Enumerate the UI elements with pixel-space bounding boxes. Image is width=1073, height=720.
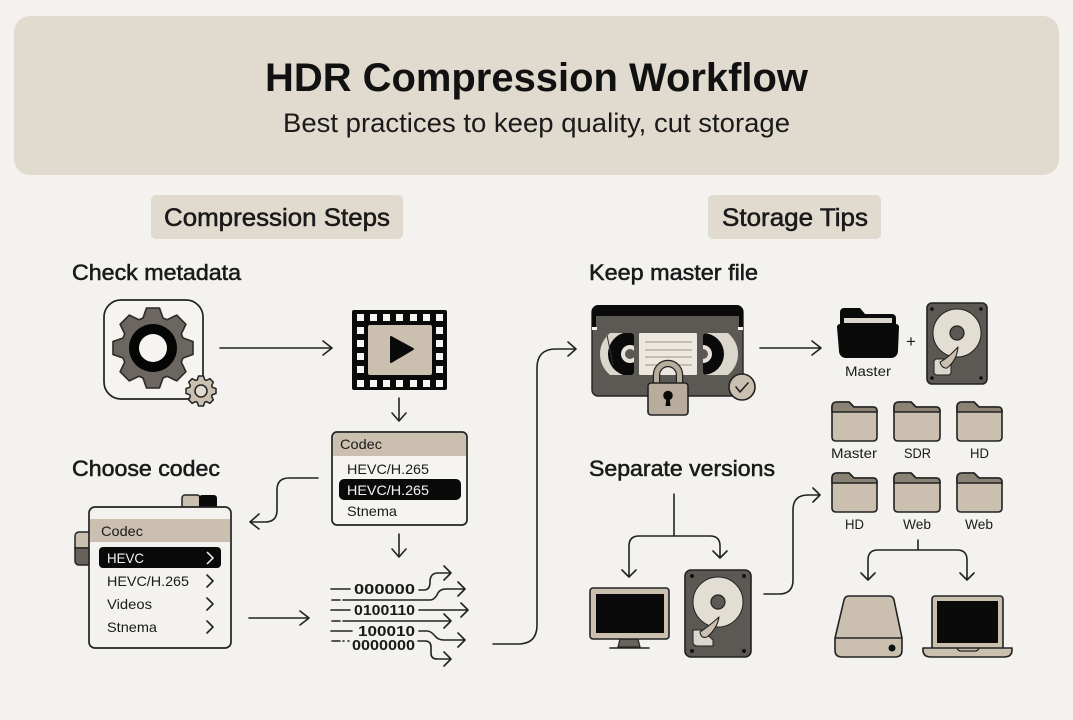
binary stream graphic: 0000000: [352, 637, 415, 654]
icon: padlock: [648, 364, 688, 415]
folder: Master: Master: [831, 445, 877, 461]
arrows: folder split to devices: [861, 540, 974, 580]
tab: top: [182, 495, 217, 509]
folder: SDR: SDR: [904, 445, 931, 461]
binary stream graphic: [331, 566, 468, 666]
section heading: Storage Tips: [708, 195, 881, 239]
icon: gear box: [104, 300, 216, 406]
heading: Separate versions: Separate versions: [589, 456, 775, 481]
folder: HD: [957, 402, 1002, 461]
folder: Master: [831, 402, 877, 461]
section heading: Storage Tips: Storage Tips: [722, 204, 868, 232]
plus sign: +: [906, 332, 916, 351]
folder: Web (right): [957, 473, 1002, 532]
heading: Check metadata: Check metadata: [72, 260, 242, 285]
folder: Web: [894, 473, 940, 532]
heading: Choose codec: Choose codec: [72, 456, 220, 481]
panel: large codec menu: HEVC: [107, 550, 144, 566]
arrow: versions to folders: [764, 488, 820, 594]
arrow: codec menu to binary stream: [392, 534, 406, 557]
folder: HD (second row): [832, 473, 877, 532]
subtitle: Best practices to keep quality, cut storage: [283, 108, 790, 138]
title: HDR Compression Workflow: [265, 56, 809, 100]
binary stream graphic: 0100110: [354, 602, 415, 619]
icon: small gear: [186, 376, 216, 406]
panel: small codec menu: HEVC/H.265: [347, 461, 429, 477]
panel: small codec menu: [332, 432, 467, 525]
icon: hard drive: [927, 303, 987, 384]
panel: small codec menu: Codec: [340, 436, 382, 452]
binary stream graphic: 100010: [358, 623, 415, 640]
icon: external drive: [835, 596, 902, 657]
arrow: cassette to master folder: [760, 341, 821, 355]
tab: left: [75, 532, 90, 565]
arrows: version split: [622, 494, 727, 577]
folder: Web: Web: [903, 516, 931, 532]
section heading: Compression Steps: [151, 195, 403, 239]
arrow: gear to film: [220, 341, 332, 355]
section heading: Compression Steps: Compression Steps: [164, 204, 390, 232]
icon: black master folder: [837, 308, 899, 379]
folder: HD (second row): HD: [845, 516, 864, 532]
arrow: codec menu to choose codec: [250, 478, 318, 529]
icon: film strip with play: [352, 310, 447, 390]
label: Master: [845, 363, 891, 379]
folder: Web (right): Web: [965, 516, 993, 532]
icon: laptop: [923, 596, 1012, 657]
panel: large codec menu: HEVC/H.265: [107, 573, 189, 589]
folder: HD: HD: [970, 445, 989, 461]
heading: Keep master file: Keep master file: [589, 260, 758, 285]
panel: small codec menu: Stnema: [347, 503, 397, 519]
header banner: [14, 16, 1059, 175]
icon: locked video cassette: [592, 305, 755, 415]
panel: small codec menu: HEVC/H.265: [347, 482, 429, 498]
arrow: film to codec menu: [392, 398, 406, 421]
panel: large codec menu: Videos: [107, 596, 152, 612]
folder: SDR: [894, 402, 940, 461]
icon: monitor: [590, 588, 669, 648]
panel: large codec menu: Stnema: [107, 619, 157, 635]
panel: large codec menu: Codec: [101, 523, 143, 539]
arrow: binary to master file: [493, 342, 576, 644]
icon: check badge: [729, 374, 755, 400]
icon: hard drive (versions): [685, 570, 751, 657]
binary stream graphic: 000000: [354, 581, 415, 598]
arrow: large menu to binary: [249, 611, 309, 625]
panel: large codec menu: [75, 495, 231, 648]
